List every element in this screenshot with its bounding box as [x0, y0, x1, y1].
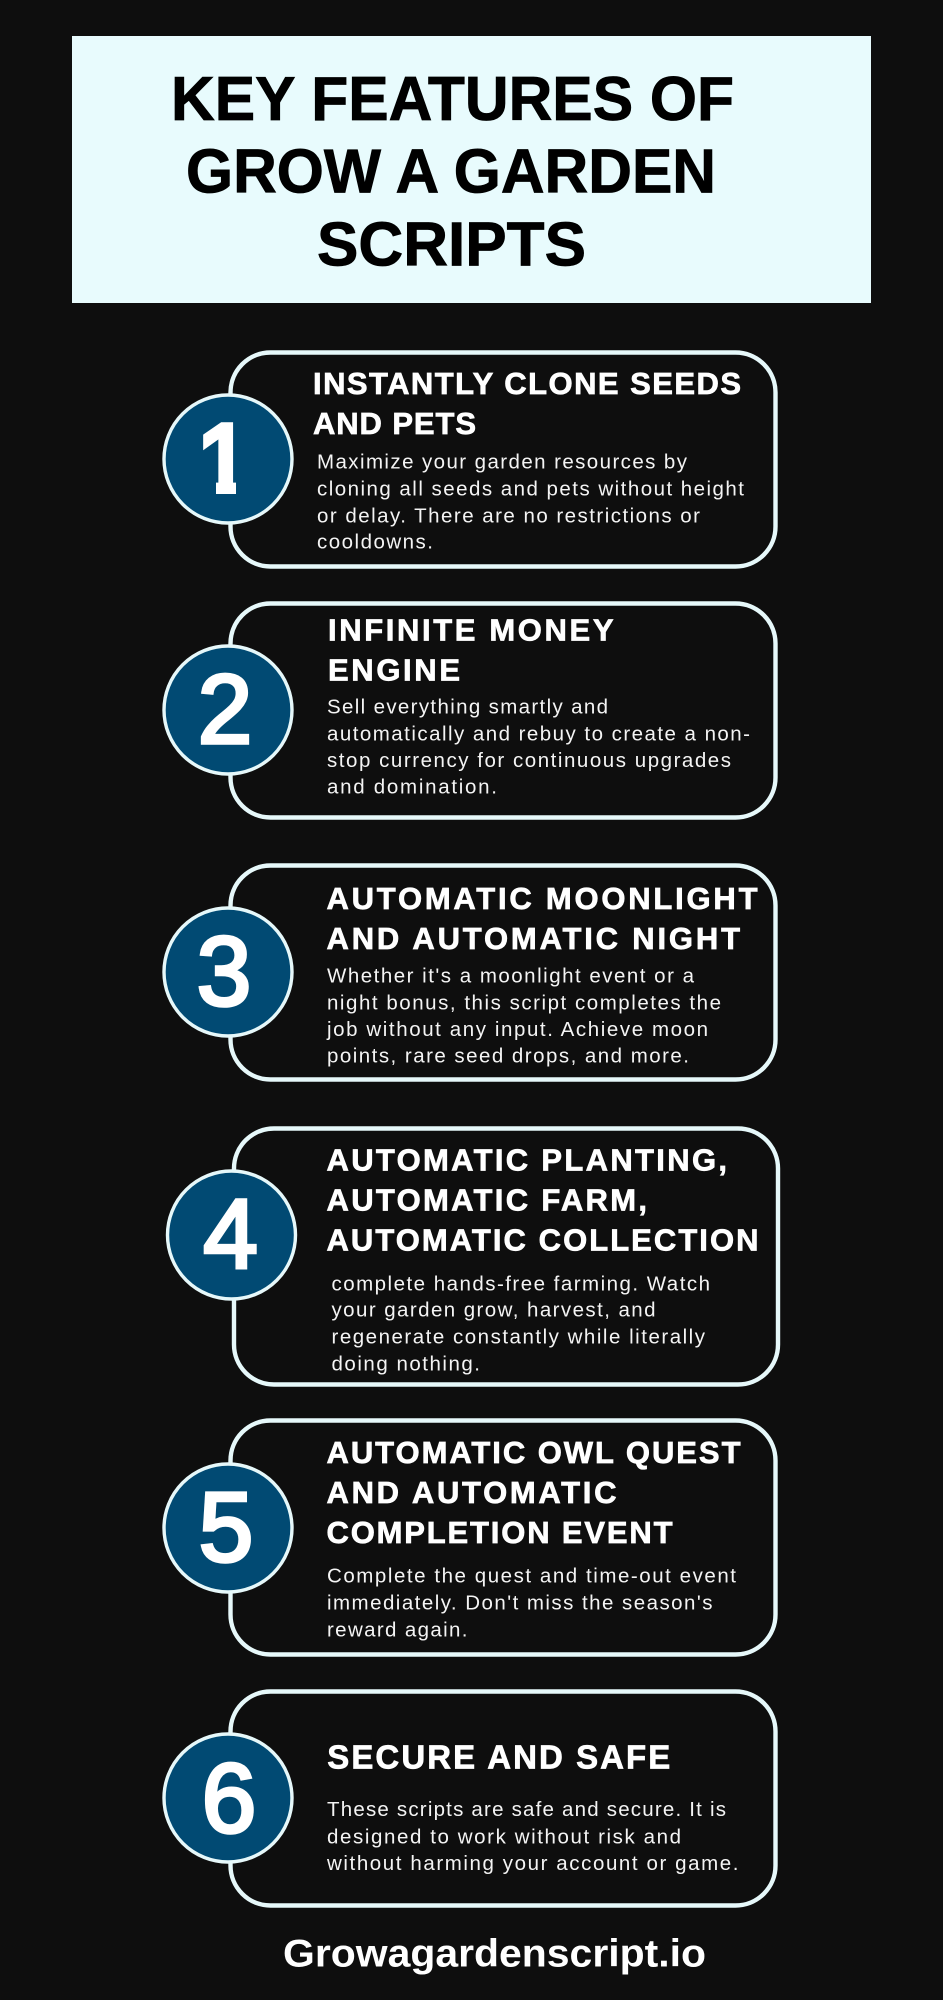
panel 6 description — [326, 1798, 738, 1875]
number badge 6 — [164, 1734, 292, 1862]
number badge 6: 6 — [202, 1743, 256, 1853]
panel 3: automatic moonlight and automatic night — [164, 866, 776, 1080]
number badge 2 — [164, 646, 292, 774]
number badge 4 — [168, 1171, 296, 1299]
panel 1 description — [317, 450, 744, 554]
title banner — [72, 36, 871, 303]
panel 4: automatic planting, farm, collection — [168, 1128, 778, 1384]
panel 2 description: automatically and rebuy to create a non- — [327, 722, 750, 746]
panel 1: instantly clone seeds and pets — [164, 352, 776, 566]
panel 4 heading: AUTOMATIC COLLECTION — [326, 1223, 758, 1258]
number badge 4: 4 — [203, 1179, 258, 1289]
panel 2 frame — [230, 604, 776, 818]
panel 4 description: doing nothing. — [332, 1352, 480, 1376]
panel 3 heading: AND AUTOMATIC NIGHT — [326, 921, 740, 956]
panel 5 description: reward again. — [327, 1618, 468, 1642]
number badge 3: 3 — [197, 916, 251, 1026]
panel 4 heading — [326, 1143, 758, 1258]
panel 2: infinite money engine — [164, 604, 776, 818]
panel 2 description: stop currency for continuous upgrades — [327, 749, 731, 772]
panel 3 description — [326, 964, 721, 1068]
panel 1 frame — [230, 352, 776, 566]
title text: SCRIPTS — [317, 210, 586, 280]
panel 2 description: and domination. — [327, 776, 497, 798]
panel 2 heading: INFINITE MONEY — [328, 613, 614, 648]
panel 1 heading: INSTANTLY CLONE SEEDS — [313, 366, 741, 401]
number badge 5 — [164, 1464, 292, 1592]
panel 3 description: Whether it's a moonlight event or a — [327, 964, 695, 988]
panel 3 frame — [230, 866, 776, 1080]
title text: GROW A GARDEN — [186, 138, 716, 206]
panel 5 heading: AUTOMATIC OWL QUEST — [326, 1435, 741, 1470]
number badge 3 — [164, 908, 292, 1036]
panel 5 description: Complete the quest and time-out event — [327, 1564, 736, 1588]
panel 4 heading: AUTOMATIC PLANTING, — [326, 1143, 727, 1178]
footer website name: Growagardenscript.io — [283, 1933, 706, 1976]
number badge 5: 5 — [199, 1472, 253, 1582]
panel 3 heading: AUTOMATIC MOONLIGHT — [326, 881, 758, 916]
panel 2 heading: ENGINE — [328, 653, 460, 688]
panel 1 description: Maximize your garden resources by — [317, 450, 688, 474]
panel 6 description: These scripts are safe and secure. It is — [327, 1798, 726, 1821]
panel 1 description: or delay. There are no restrictions or — [317, 504, 700, 528]
panel 5 frame — [230, 1420, 776, 1654]
panel 4 description: your garden grow, harvest, and — [332, 1298, 656, 1322]
panel 3 description: night bonus, this script completes the — [327, 992, 721, 1014]
panel 2 description: Sell everything smartly and — [327, 696, 608, 718]
panel 1 description: cloning all seeds and pets without height — [317, 478, 744, 500]
title text: KEY FEATURES OF — [171, 65, 734, 134]
panel 5 description — [327, 1564, 736, 1642]
panel 1 heading: AND PETS — [313, 406, 476, 441]
panel 5 heading: AND AUTOMATIC — [326, 1475, 616, 1510]
panel 6: secure and safe — [164, 1692, 776, 1906]
number badge 1: 1 — [197, 404, 251, 514]
panel 4 frame — [234, 1128, 778, 1384]
panel 5: automatic owl quest and completion event — [164, 1420, 776, 1654]
number badge 1 — [164, 395, 292, 523]
panel 3 description: job without any input. Achieve moon — [326, 1018, 708, 1041]
panel 4 description — [332, 1272, 710, 1376]
panel 2 heading — [328, 613, 614, 688]
title text — [171, 65, 734, 280]
panel 4 heading: AUTOMATIC FARM, — [326, 1183, 647, 1218]
panel 2 description — [327, 696, 750, 798]
panel 6 description: designed to work without risk and — [327, 1826, 681, 1848]
panel 6 frame — [230, 1692, 776, 1906]
panel 6 description: without harming your account or game. — [326, 1852, 738, 1875]
panel 3 heading — [326, 881, 758, 956]
panel 5 heading: COMPLETION EVENT — [326, 1515, 673, 1550]
panel 1 description: cooldowns. — [317, 530, 433, 554]
number badge 2: 2 — [198, 654, 252, 764]
panel 5 heading — [326, 1435, 741, 1550]
panel 4 description: regenerate constantly while literally — [332, 1326, 706, 1348]
panel 4 description: complete hands-free farming. Watch — [332, 1272, 710, 1296]
panel 1 heading — [313, 366, 741, 441]
panel 5 description: immediately. Don't miss the season's — [327, 1592, 712, 1614]
panel 6 heading: SECURE AND SAFE — [327, 1739, 670, 1776]
panel 3 description: points, rare seed drops, and more. — [327, 1044, 689, 1068]
